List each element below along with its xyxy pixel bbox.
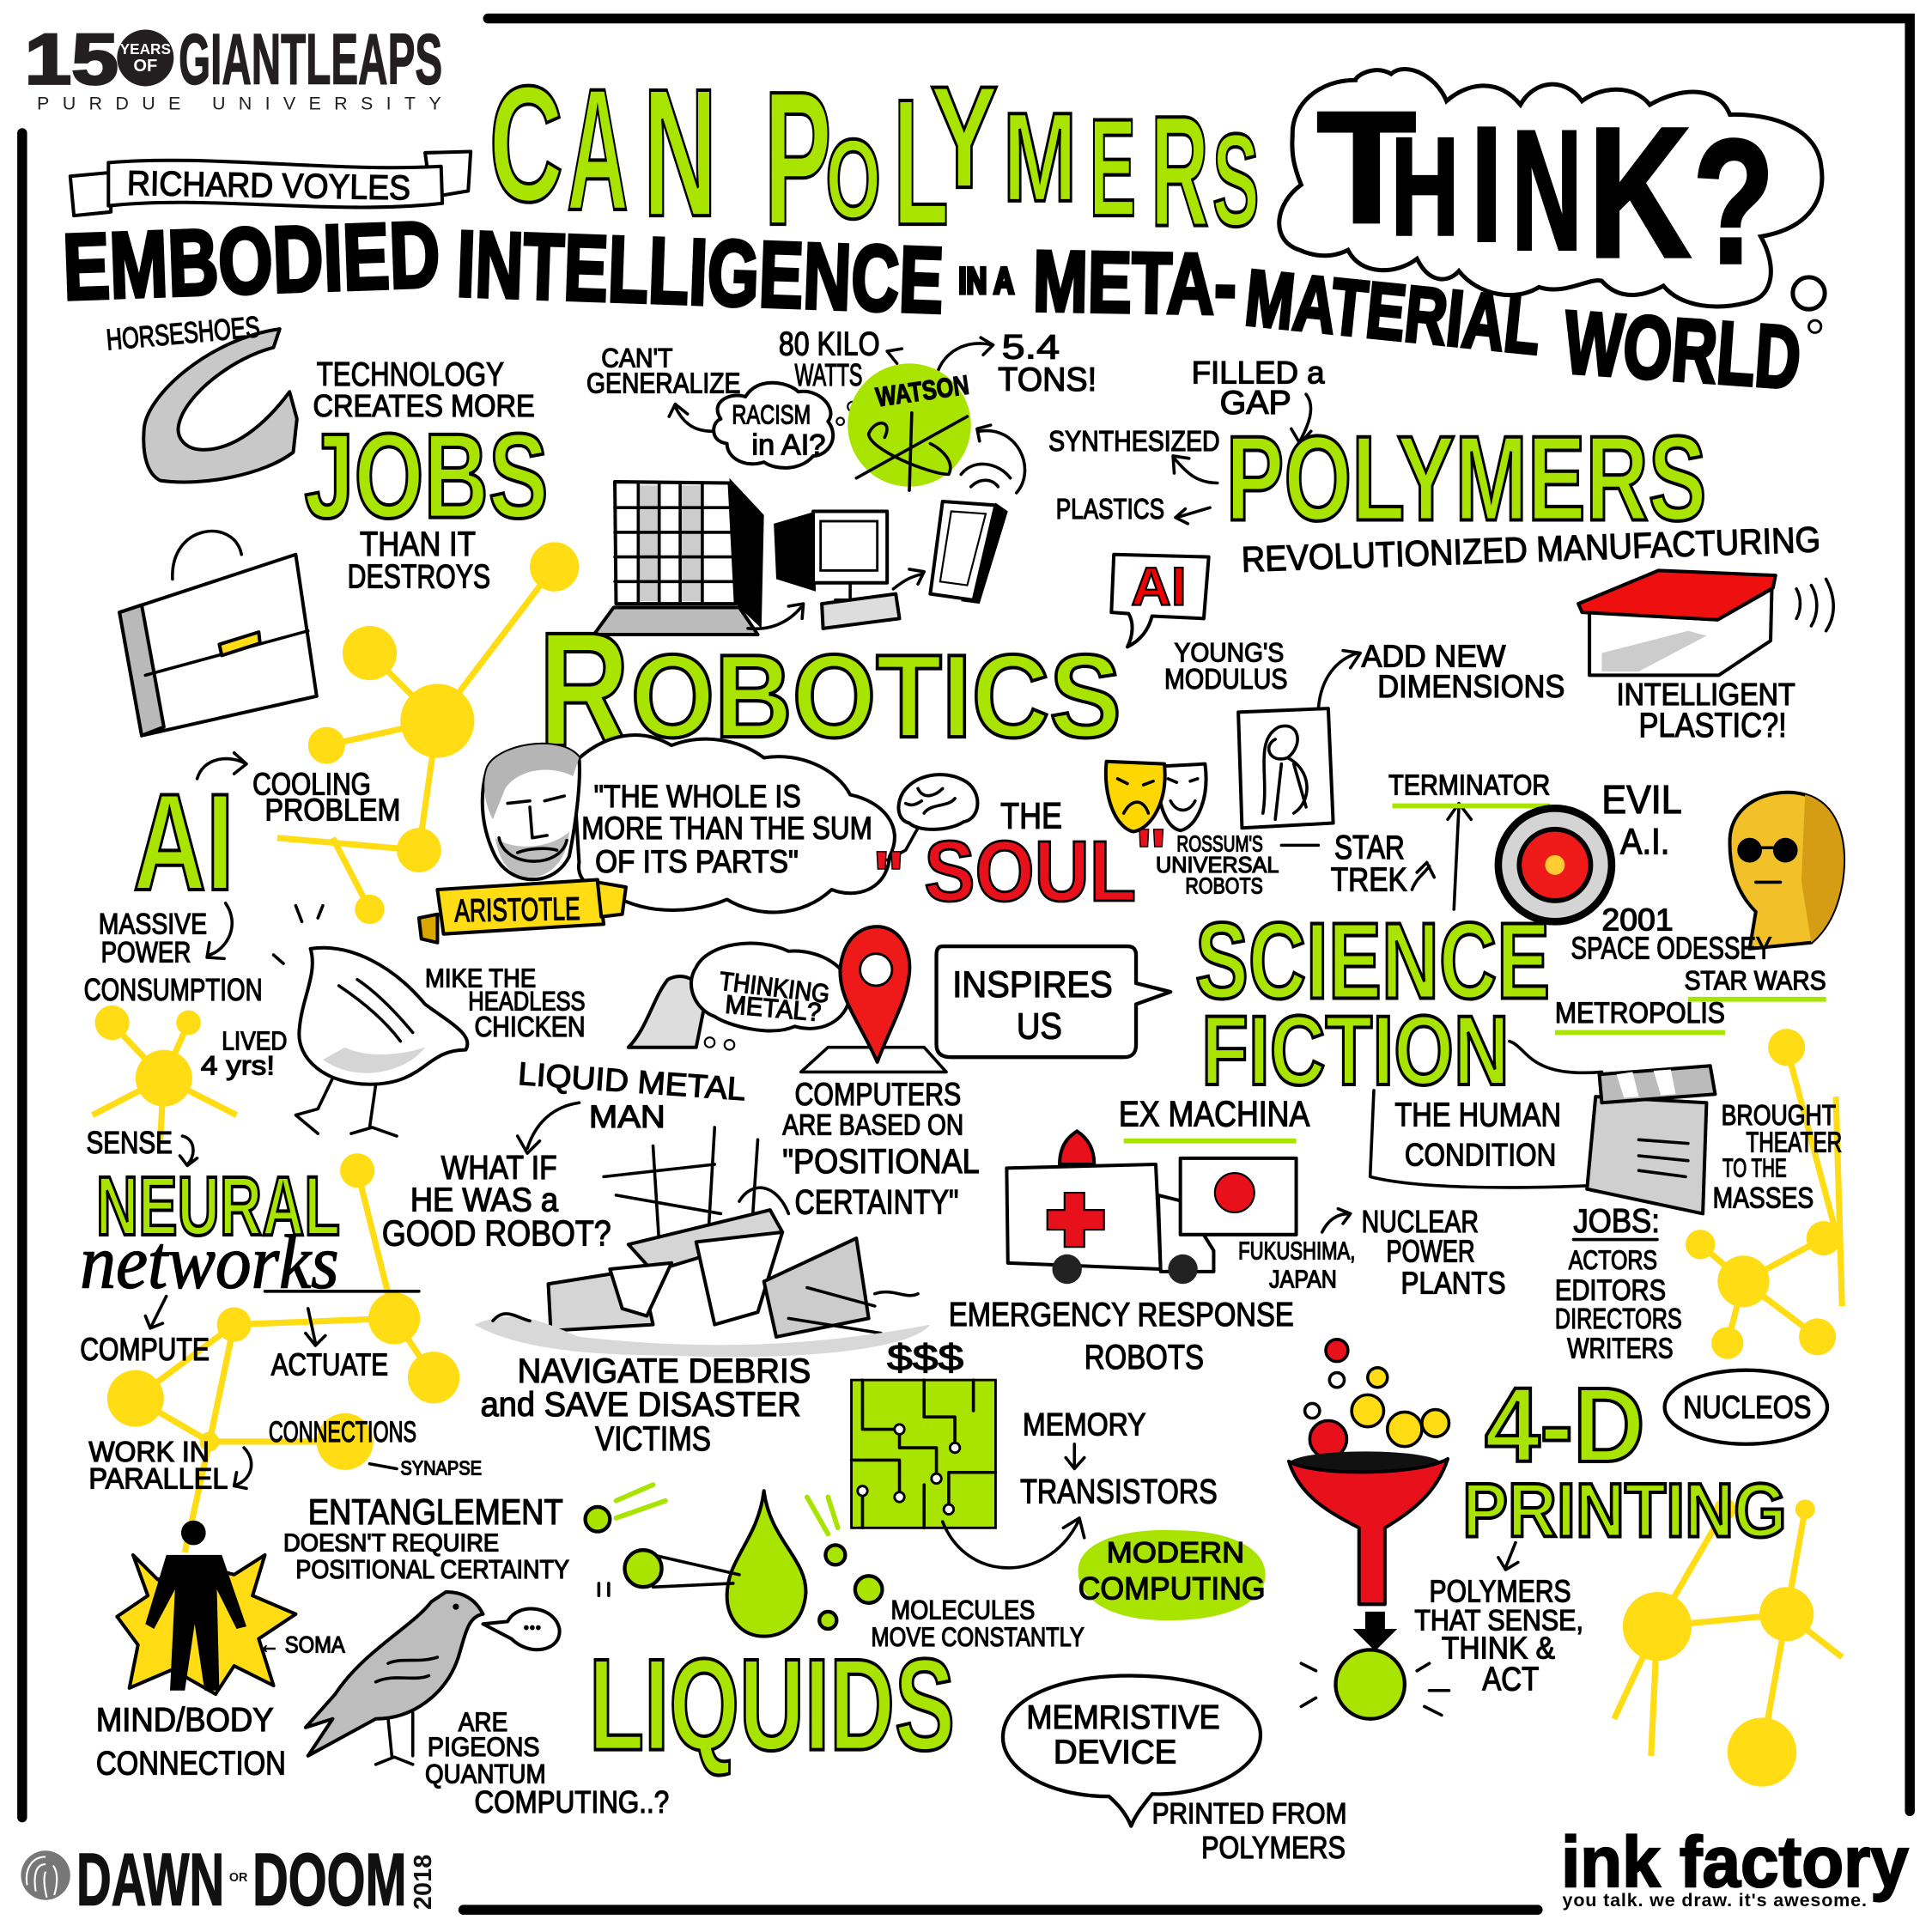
panel: neural networks: CONNECTIONS [269, 1416, 416, 1449]
text: technology creates more jobs: THAN IT [360, 525, 476, 563]
icon: server grid [594, 478, 764, 635]
panel: sci-fi references: METROPOLIS [1555, 997, 1725, 1030]
panel: AI cooling problem: MASSIVE [99, 908, 207, 941]
icon: C-3PO head [1730, 793, 1844, 949]
panel: polymers: GAP [1220, 385, 1291, 422]
subtitle: Embodied Intelligence in a Meta-Material World [61, 202, 1804, 408]
yellow network: right upper [1686, 1029, 1842, 1359]
blob: modern computing: MODERN [1107, 1537, 1244, 1570]
icon: funnel with materials [1289, 1340, 1449, 1719]
text: Rossum's Universal Robots: UNIVERSAL [1156, 854, 1279, 878]
icon: collapsed building debris [474, 1127, 930, 1357]
panel: Aristotle quote [419, 735, 977, 943]
blob: modern computing: COMPUTING [1078, 1571, 1266, 1607]
title: Can Polymers [489, 52, 1260, 265]
cloud: thinking metal: THINKING [718, 967, 831, 1009]
panel: 4-D printing: ACT [1482, 1662, 1539, 1698]
icon: droplet and molecules [586, 1485, 882, 1637]
panel: polymers: SYNTHESIZED [1048, 425, 1220, 457]
text: printed from polymers: PRINTED FROM [1152, 1798, 1346, 1831]
list: jobs: EDITORS [1555, 1274, 1666, 1307]
panel: emergency response robots: NUCLEAR [1362, 1205, 1479, 1239]
panel: thinking metal: CERTAINTY" [795, 1182, 958, 1221]
panel: Young's modulus and new dimensions: DIMENSIONS [1377, 668, 1564, 704]
icon: clapperboard [1587, 1066, 1715, 1213]
thought cloud: Think?: H [1391, 111, 1459, 264]
text: Rossum's Universal Robots [1156, 833, 1318, 898]
speech box: AI [1111, 555, 1209, 647]
icon: headless chicken [274, 906, 467, 1136]
logo: 150 years of giant leaps: GIANTLEAPS [179, 20, 442, 100]
label: Aristotle: ARISTOTLE [454, 890, 580, 928]
heading: science fiction: FICTION [1201, 996, 1510, 1106]
panel: 4-D printing [1289, 1340, 1827, 1719]
list: jobs: WRITERS [1567, 1332, 1674, 1364]
icon: person with starburst [117, 1521, 295, 1694]
logo: Dawn or Doom 2018: DOOM [252, 1838, 407, 1921]
panel: mind body connection: CONNECTION [96, 1745, 286, 1782]
panel: sci-fi references: TREK [1331, 861, 1407, 898]
panel: pigeons quantum computing: ARE [459, 1706, 507, 1737]
panel: sci-fi references: STAR WARS [1685, 964, 1826, 995]
logo: Dawn or Doom 2018: OR [229, 1871, 248, 1885]
panel: liquids: LIQUIDS [589, 1632, 955, 1778]
panel: Watson [586, 325, 1097, 490]
icon: desktop computer [748, 512, 924, 629]
panel: AI cooling problem: AI [133, 766, 234, 920]
panel: Mike the headless chicken: LIVED [222, 1028, 287, 1056]
panel: neural networks: SYNAPSE [400, 1457, 482, 1479]
panel: emergency response robots: FUKUSHIMA, [1238, 1238, 1355, 1266]
heading: Robotics [538, 599, 1121, 781]
thought cloud: Think?: T [1317, 79, 1416, 255]
panel: Mike the headless chicken: 4 yrs! [201, 1049, 275, 1080]
panel: AI cooling problem: CONSUMPTION [84, 973, 263, 1007]
panel: sci-fi references: TERMINATOR [1388, 769, 1550, 801]
logo: Dawn or Doom 2018: 2018 [410, 1855, 437, 1910]
panel: pigeons quantum computing [283, 1492, 669, 1820]
panel: 4-D printing: POLYMERS [1430, 1574, 1571, 1608]
panel: liquid metal man and debris: VICTIMS [595, 1419, 711, 1458]
panel: neural networks: WORK IN [88, 1436, 210, 1467]
panel: sci-fi references [1331, 769, 1844, 1032]
icon: circuit board [852, 1380, 995, 1528]
panel: thinking metal [629, 927, 980, 1221]
heading: Robotics: OBOTICS [631, 630, 1121, 762]
panel: pigeons quantum computing: ENTANGLEMENT [308, 1492, 563, 1532]
panel: technology creates jobs [105, 311, 549, 736]
speech box: inspires us: US [1017, 1006, 1062, 1048]
panel: emergency response robots: JAPAN [1269, 1267, 1337, 1294]
text: brought theater to the masses [1713, 1099, 1842, 1214]
text: technology creates more jobs: TECHNOLOGY [317, 356, 504, 393]
title: Can Polymers: M [1003, 87, 1077, 228]
text: printed from polymers: POLYMERS [1201, 1831, 1346, 1865]
label: Aristotle [419, 880, 626, 943]
icon: briefcase [119, 532, 317, 736]
heading: Robotics: R [538, 599, 629, 781]
panel: neural networks: NEURAL [96, 1159, 340, 1253]
icon: Watson atom [848, 363, 971, 490]
panel: Mike the headless chicken [201, 906, 586, 1136]
title: Can Polymers: R [1151, 83, 1209, 259]
icon: speech bubble with dots: ••• [523, 1619, 541, 1638]
panel: polymers [1048, 354, 1821, 580]
panel: emergency response robots: EX MACHINA [1119, 1094, 1310, 1134]
panel: Watson: 80 KILO [779, 325, 880, 362]
panel: emergency response robots [949, 1094, 1506, 1376]
heading: the soul: " [872, 838, 905, 915]
panel: Young's modulus and new dimensions: MODULUS [1164, 663, 1288, 695]
cloud: quote: MORE THAN THE SUM [581, 810, 872, 846]
panel: pigeons quantum computing: QUANTUM [425, 1758, 546, 1789]
logo: Dawn or Doom 2018: DAWN [76, 1838, 224, 1921]
panel: Watson: TONS! [998, 361, 1097, 398]
icon: horseshoe: HORSESHOES [105, 311, 261, 356]
thought cloud: Think?: K [1589, 88, 1691, 295]
heading: the soul: THE [1000, 795, 1062, 836]
box: the human condition: THE HUMAN [1394, 1097, 1561, 1134]
icon: Watson atom: WATSON [874, 369, 971, 412]
bubble: nucleos [1665, 1370, 1827, 1444]
panel: liquid metal man and debris: HE WAS a [410, 1182, 558, 1219]
icon: HAL eye [1498, 808, 1612, 921]
icon: intelligent plastic box: INTELLIGENT [1617, 677, 1795, 712]
banner: Richard Voyles [70, 151, 471, 216]
panel: liquid metal man and debris [382, 1055, 930, 1458]
panel: Watson: 5.4 [1002, 328, 1060, 367]
panel: pigeons quantum computing: COMPUTING..? [474, 1785, 669, 1820]
text: technology creates more jobs: JOBS [304, 409, 549, 544]
text: brought theater to the masses: TO THE [1722, 1154, 1787, 1182]
panel: mind body connection: MIND/BODY [96, 1702, 274, 1739]
panel: AI cooling problem: PROBLEM [265, 793, 400, 828]
icon: Aristotle portrait [483, 744, 580, 879]
speech bubble: memristive device: DEVICE [1054, 1734, 1176, 1771]
heading: the soul: " [1135, 816, 1168, 893]
panel: neural networks: PARALLEL [88, 1462, 228, 1495]
icon: liquid metal head [629, 976, 705, 1048]
cloud: thinking metal: METAL? [724, 991, 823, 1027]
panel: 4-D printing: 4-D [1485, 1366, 1645, 1485]
panel: liquids: MOLECULES [890, 1595, 1035, 1625]
title: Can Polymers: E [1089, 90, 1136, 246]
cloud: racism in AI [714, 383, 858, 468]
subtitle: Embodied Intelligence in a Meta-Material World: META- [1032, 234, 1237, 333]
icon: intelligent plastic box [1578, 570, 1833, 744]
icon: theatre masks [1106, 762, 1206, 832]
panel: AI cooling problem [84, 753, 400, 1007]
box: the human condition [1370, 1042, 1601, 1188]
panel: liquid metal man and debris: LIQUID METAL [517, 1055, 747, 1107]
cloud: quote: "THE WHOLE IS [594, 778, 801, 814]
heading: the soul: SOUL [924, 823, 1136, 920]
panel: circuit memory transistors: MEMORY [1023, 1406, 1146, 1443]
text: technology creates more jobs [304, 356, 549, 595]
subtitle: Embodied Intelligence in a Meta-Material World: IN A [958, 261, 1014, 302]
panel: Mike the headless chicken: MIKE THE [425, 964, 536, 993]
subtitle: Embodied Intelligence in a Meta-Material World: WORLD [1561, 292, 1804, 408]
logo: 150 years of giant leaps: 15 [25, 20, 118, 100]
panel: Young's modulus and new dimensions [1164, 637, 1564, 828]
subtitle: Embodied Intelligence in a Meta-Material World: INTELLIGENCE [455, 211, 945, 333]
panel: sci-fi references: EVIL [1601, 777, 1682, 822]
thought cloud: Think?: N [1512, 95, 1582, 285]
panel: neural networks: COMPUTE [80, 1331, 210, 1367]
panel: Young's modulus and new dimensions: YOUNG'S [1175, 637, 1284, 668]
panel: Mike the headless chicken: HEADLESS [468, 986, 586, 1017]
panel: liquid metal man and debris: NAVIGATE DEBRIS [518, 1352, 811, 1390]
text: technology creates more jobs: CREATES MORE [313, 389, 535, 423]
logo: Dawn or Doom 2018 [21, 1838, 437, 1921]
panel: polymers: POLYMERS [1226, 411, 1706, 546]
speech bubble: memristive device: MEMRISTIVE [1026, 1699, 1220, 1736]
panel: 4-D printing: PRINTING [1462, 1467, 1787, 1552]
panel: neural networks: networks [80, 1221, 339, 1305]
logo: 150 years of giant leaps: YEARS [120, 40, 171, 58]
text: brought theater to the masses: BROUGHT [1722, 1099, 1836, 1131]
icon: horseshoe [105, 311, 297, 482]
text: brought theater to the masses: MASSES [1713, 1182, 1814, 1214]
text: brought theater to the masses: THEATER [1746, 1127, 1842, 1158]
list: jobs: JOBS: [1573, 1203, 1660, 1240]
speech bubble: memristive device [1003, 1676, 1261, 1826]
panel: Watson: GENERALIZE [586, 368, 740, 399]
panel: 4-D printing: THAT SENSE, [1414, 1604, 1583, 1637]
panel: liquids: MOVE CONSTANTLY [872, 1621, 1084, 1652]
panel: AI cooling problem: COOLING [252, 768, 371, 802]
cloud: racism in AI: in AI? [751, 428, 825, 461]
panel: pigeons quantum computing: POSITIONAL CERTAINTY [295, 1556, 569, 1584]
panel: polymers: PLASTICS [1056, 493, 1164, 525]
icon: ambulance [1006, 1131, 1213, 1284]
title: Can Polymers: A [567, 52, 629, 246]
title: Can Polymers: S [1212, 106, 1260, 254]
list: jobs [1555, 1203, 1682, 1364]
heading: the soul [872, 795, 1168, 920]
panel: Watson: CAN'T [601, 343, 672, 374]
logo: 150 years of giant leaps [25, 20, 442, 114]
panel: Watson: WATTS [795, 358, 862, 392]
panel: emergency response robots: EMERGENCY RESPONSE [949, 1297, 1294, 1334]
panel: circuit memory transistors: TRANSISTORS [1020, 1473, 1218, 1511]
panel: sci-fi references: SPACE ODESSEY [1571, 931, 1772, 965]
cloud: thinking metal [691, 944, 850, 1050]
thought cloud: Think? [1279, 70, 1825, 332]
logo: ink factory: you talk. we draw. it's awesome. [1563, 1890, 1867, 1911]
cloud: quote: OF ITS PARTS" [595, 843, 799, 879]
icon: Japan flag [1181, 1158, 1297, 1235]
panel: liquid metal man and debris: WHAT IF [441, 1150, 557, 1187]
speech box: inspires us: INSPIRES [952, 964, 1113, 1005]
panel: Young's modulus and new dimensions: ADD NEW [1362, 639, 1506, 673]
speech box: AI: AI [1131, 557, 1187, 617]
panel: thinking metal: "POSITIONAL [782, 1142, 980, 1181]
heading: science fiction: SCIENCE [1195, 900, 1550, 1021]
blob: modern computing [1078, 1530, 1266, 1620]
list: jobs: ACTORS [1569, 1244, 1657, 1275]
panel: computers [594, 425, 1025, 635]
icon: pigeon [306, 1592, 483, 1765]
yellow network: right lower [1614, 1498, 1842, 1787]
panel: liquid metal man and debris: and SAVE DISASTER [481, 1385, 801, 1424]
panel: emergency response robots: ROBOTS [1084, 1338, 1204, 1376]
text: printed from polymers [1152, 1798, 1346, 1865]
text: technology creates more jobs: DESTROYS [348, 558, 490, 595]
panel: 4-D printing: THINK & [1442, 1631, 1555, 1665]
panel: AI cooling problem: POWER [101, 937, 191, 969]
panel: circuit memory transistors [852, 1338, 1266, 1620]
panel: mind body connection [96, 1521, 345, 1782]
logo: ink factory: ink factory [1561, 1822, 1909, 1902]
panel: mind body connection: ← SOMA [258, 1631, 345, 1657]
logo: 150 years of giant leaps: PURDUE UNIVERSITY [37, 94, 441, 114]
title: Can Polymers: N [643, 52, 717, 255]
panel: liquid metal man and debris: GOOD ROBOT? [382, 1213, 611, 1254]
text: Rossum's Universal Robots: ROSSUM'S [1176, 833, 1263, 857]
icon: location pin [801, 927, 946, 1072]
panel: thinking metal: ARE BASED ON [782, 1109, 963, 1142]
panel: sci-fi references: STAR [1334, 829, 1405, 866]
cloud: quote [573, 735, 895, 912]
list: jobs: DIRECTORS [1555, 1303, 1682, 1334]
icon: speech bubble with dots [483, 1609, 560, 1649]
icon: smartphone and wifi [930, 425, 1025, 604]
speech box: inspires us [937, 946, 1170, 1057]
yellow network: neural [107, 1153, 459, 1552]
title: Can Polymers: L [893, 62, 949, 263]
panel: neural networks: SENSE [86, 1126, 173, 1160]
text: Rossum's Universal Robots: ROBOTS [1185, 874, 1263, 898]
panel: neural networks [80, 1126, 482, 1495]
panel: pigeons quantum computing: PIGEONS [428, 1731, 540, 1762]
panel: neural networks: ACTUATE [271, 1347, 388, 1382]
icon: brain [887, 775, 977, 860]
panel: pigeons quantum computing: DOESN'T REQUIRE [283, 1530, 499, 1558]
panel: emergency response robots: PLANTS [1401, 1267, 1506, 1301]
panel: polymers: REVOLUTIONIZED MANUFACTURING [1241, 519, 1821, 580]
panel: polymers: FILLED a [1192, 354, 1325, 390]
yellow molecule: upper left [277, 542, 579, 924]
yellow molecule: left middle [93, 1005, 237, 1139]
subtitle: Embodied Intelligence in a Meta-Material World: EMBODIED [61, 202, 441, 320]
panel: thinking metal: COMPUTERS [795, 1076, 961, 1112]
cloud: racism in AI: RACISM [732, 399, 811, 430]
panel: liquids [586, 1485, 1084, 1778]
thought cloud: Think?: I [1471, 94, 1502, 276]
banner: Richard Voyles: RICHARD VOYLES [127, 164, 410, 207]
panel: liquid metal man and debris: MAN [589, 1098, 665, 1134]
subtitle: Embodied Intelligence in a Meta-Material World: MATERIAL [1242, 254, 1545, 371]
title: Can Polymers: C [489, 52, 563, 236]
logo: 150 years of giant leaps: OF [133, 57, 157, 76]
heading: science fiction [1195, 900, 1550, 1106]
panel: sci-fi references: A.I. [1620, 821, 1669, 862]
title: Can Polymers: O [825, 115, 881, 242]
box: the human condition: CONDITION [1405, 1136, 1556, 1172]
thought cloud: Think?: ? [1693, 104, 1774, 301]
title: Can Polymers: Y [930, 56, 998, 218]
bubble: nucleos: NUCLEOS [1683, 1389, 1811, 1425]
icon: intelligent plastic box: PLASTIC?! [1638, 706, 1787, 744]
panel: sci-fi references: 2001 [1601, 902, 1674, 937]
panel: Mike the headless chicken: CHICKEN [474, 1011, 586, 1042]
panel: circuit memory transistors: $$$ [887, 1338, 963, 1379]
title: Can Polymers: P [764, 52, 832, 265]
panel: emergency response robots: POWER [1386, 1234, 1475, 1268]
